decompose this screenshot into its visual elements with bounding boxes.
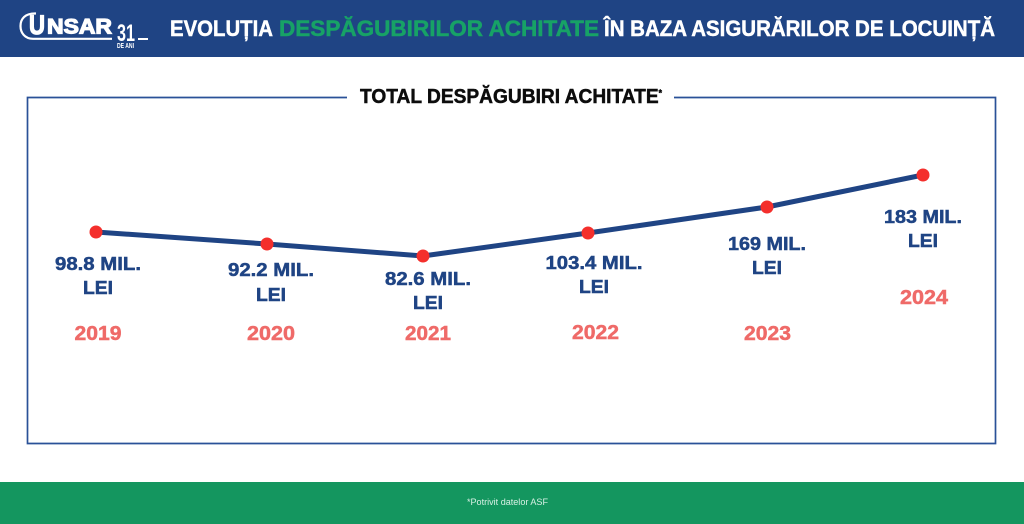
footnote: *Potrivit datelor ASF	[467, 497, 548, 507]
data label 2020	[228, 259, 314, 345]
footer band	[0, 482, 1024, 524]
data label 2024	[884, 206, 962, 309]
data label 2019: 2019	[74, 323, 122, 345]
logo	[20, 10, 148, 50]
data label 2022: LEI	[579, 276, 609, 297]
data label 2022: 2022	[572, 322, 619, 344]
data label 2023: 169 MIL.	[728, 233, 806, 254]
logo: DE ANI	[117, 43, 134, 50]
panel: chart frame	[28, 98, 996, 444]
data label 2024: 183 MIL.	[884, 206, 962, 227]
data label 2023: LEI	[752, 257, 782, 278]
chart heading: TOTAL DESPĂGUBIRI ACHITATE	[360, 86, 672, 108]
data points	[90, 168, 930, 262]
data label 2023	[728, 233, 806, 345]
data label 2019: 98.8 MIL.	[55, 253, 141, 274]
header title: DESPĂGUBIRILOR ACHITATE	[279, 16, 599, 41]
data label 2019: LEI	[83, 277, 113, 298]
header title: ÎN BAZA ASIGURĂRILOR DE LOCUINȚĂ	[603, 16, 995, 41]
header band	[0, 0, 1024, 57]
logo: U	[29, 10, 45, 40]
data label 2023: 2023	[744, 323, 791, 345]
chart heading: *	[659, 88, 662, 98]
data label 2021: 2021	[405, 323, 451, 345]
data label 2021: 82.6 MIL.	[385, 268, 471, 289]
data label 2020: 2020	[247, 323, 295, 345]
data label 2022	[546, 252, 642, 344]
data label 2024: LEI	[908, 230, 938, 251]
data label 2021: LEI	[413, 292, 443, 313]
line chart	[90, 168, 930, 262]
data label 2021	[385, 268, 471, 345]
data label 2020: 92.2 MIL.	[228, 259, 314, 280]
data label 2020: LEI	[256, 284, 286, 305]
data label 2022: 103.4 MIL.	[546, 252, 642, 273]
logo: 31	[117, 20, 135, 47]
data label 2019	[55, 253, 141, 345]
logo: NSAR	[47, 16, 112, 38]
data label 2024: 2024	[900, 287, 949, 309]
header title	[170, 16, 995, 41]
header title: EVOLUȚIA	[170, 16, 273, 41]
